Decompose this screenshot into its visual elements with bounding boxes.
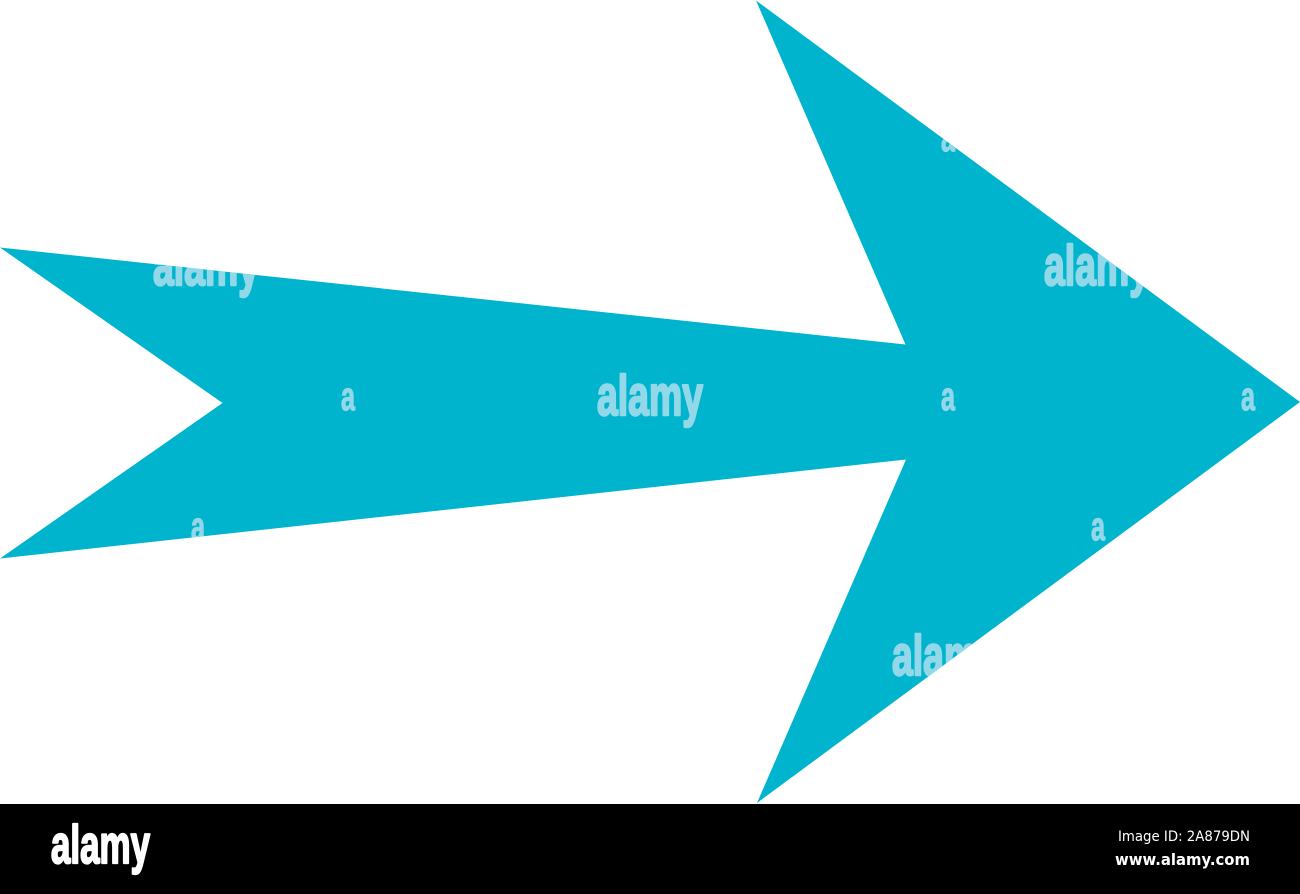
watermark: small a, head: a: [941, 375, 955, 419]
watermark: small a, upper: a: [941, 116, 955, 160]
watermark: small a, tip: a: [1241, 375, 1255, 419]
footer logo: alamy: [51, 815, 150, 875]
watermark: top left: alamy: [153, 234, 259, 298]
footer bar: [0, 804, 1300, 894]
watermark: small a, lower left: a: [191, 505, 205, 549]
website: www.alamy.com: [1115, 850, 1250, 869]
watermark: bottom right: alamy: [892, 624, 998, 688]
watermark: center: alamy: [597, 364, 703, 428]
image id: Image ID: 2A879DN: [1118, 829, 1250, 845]
watermark: small a, shaft: a: [341, 375, 355, 419]
watermark: small a, lower right: a: [1091, 505, 1105, 549]
watermark: top right: alamy: [1044, 234, 1150, 298]
watermarks clipped to arrow: [153, 116, 1255, 688]
